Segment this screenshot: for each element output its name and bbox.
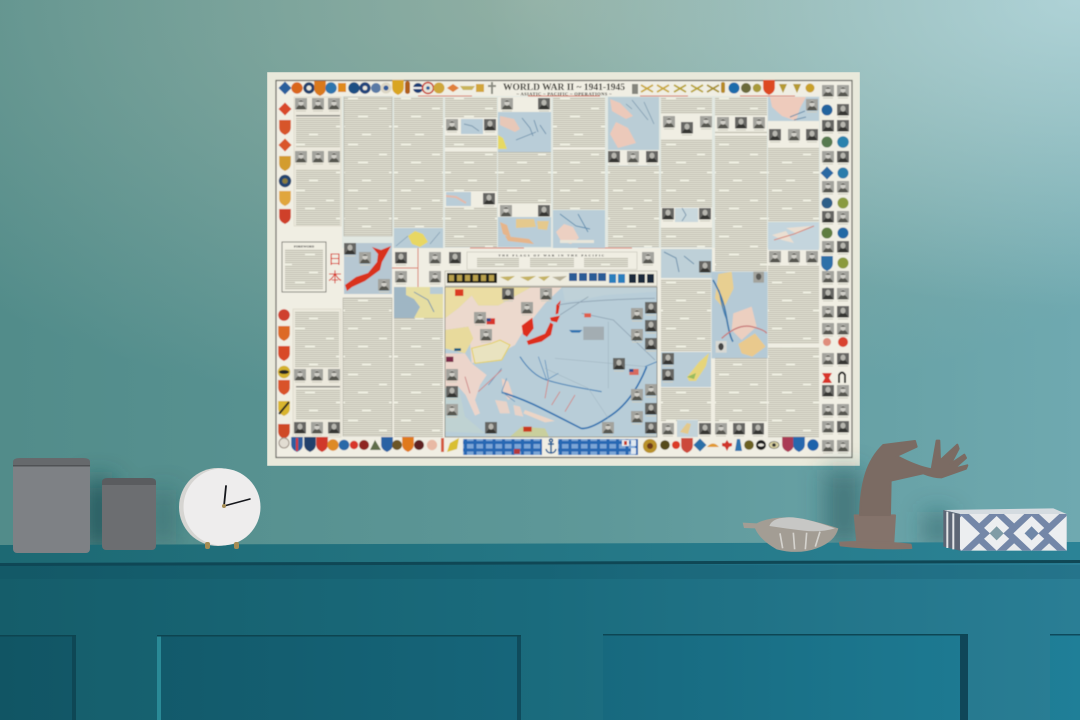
blue symbol strip right xyxy=(558,439,638,455)
black rank boxes xyxy=(447,273,497,283)
foreword box xyxy=(282,242,326,292)
column 7 xyxy=(608,97,659,247)
ship and note xyxy=(569,327,604,340)
poster sheet xyxy=(267,72,860,466)
portraits row xyxy=(769,251,818,264)
text column 5 xyxy=(498,97,551,247)
mantel front panel xyxy=(0,560,1080,720)
heading gap xyxy=(715,133,767,136)
cast shadows on wall xyxy=(86,470,951,550)
map: new guinea xyxy=(553,210,605,248)
portraits row lower xyxy=(294,422,340,436)
portraits top xyxy=(501,98,550,112)
japan in red xyxy=(522,300,561,345)
map: japan inset xyxy=(344,243,392,294)
blue chevrons xyxy=(569,273,606,281)
patterned box xyxy=(943,508,1067,551)
blue symbol strip left xyxy=(463,439,542,455)
hand sculpture xyxy=(840,441,967,548)
insignia strip xyxy=(445,271,657,286)
sea routes xyxy=(465,297,657,428)
portraits row xyxy=(661,114,712,139)
text column 2 lower xyxy=(343,298,392,436)
portraits row xyxy=(608,150,659,165)
land: northern yellow xyxy=(445,287,532,318)
kanji label: 日 xyxy=(328,252,342,267)
portraits row lower xyxy=(295,151,340,164)
large stone cylinder xyxy=(13,458,90,553)
column 10 xyxy=(768,97,819,438)
poster inner border xyxy=(276,80,852,458)
bottom badge row right xyxy=(643,437,819,453)
blue squares xyxy=(609,274,625,283)
text block xyxy=(608,166,659,247)
flags xyxy=(446,289,639,432)
portraits with inset map xyxy=(661,207,712,228)
recess panels xyxy=(0,634,1080,720)
text block xyxy=(295,311,339,367)
small stone cylinder xyxy=(102,478,156,550)
portraits lower xyxy=(498,204,551,218)
left badge column bottom xyxy=(278,309,290,448)
title: WORLD WAR II ~ 1941-1945 xyxy=(503,82,626,92)
left panel lower xyxy=(293,309,341,437)
text block xyxy=(661,139,712,207)
left badge column top xyxy=(278,102,292,224)
kanji label: 本 xyxy=(328,270,342,285)
text column 2 upper xyxy=(344,97,392,236)
land: china and manchuria xyxy=(445,287,562,363)
text column 4 xyxy=(445,97,497,247)
top badge row left xyxy=(278,80,496,96)
map: upper inset xyxy=(661,249,712,278)
bottom badge row left xyxy=(291,437,459,452)
title: ~ ASIATIC ~ PACIFIC ~ OPERATIONS ~ xyxy=(516,92,612,96)
map: column 3 island xyxy=(394,228,443,248)
right portrait column xyxy=(820,85,849,454)
left panel upper xyxy=(294,97,341,226)
white clock xyxy=(179,468,260,549)
map: east indies xyxy=(498,217,551,247)
map: okinawa xyxy=(661,352,711,387)
text column 3 upper xyxy=(394,97,443,228)
map: top xyxy=(768,97,819,121)
heading gap xyxy=(445,148,497,151)
poster xyxy=(267,72,860,466)
flags heading box: THE FLAGS OF WAR IN THE PACIFIC xyxy=(498,254,606,258)
clock feet xyxy=(205,542,239,549)
land: north east xyxy=(583,287,599,299)
shelf shadow xyxy=(0,560,1080,566)
map: column 3 lower xyxy=(394,287,443,318)
land: australia xyxy=(510,427,549,437)
portraits row xyxy=(294,369,340,382)
portrait strip with inset map xyxy=(445,118,497,135)
portraits row xyxy=(295,98,340,112)
command table xyxy=(296,386,340,420)
gold wings xyxy=(500,276,567,281)
column 9 xyxy=(712,97,768,436)
map portraits xyxy=(446,288,657,436)
inset map with portrait xyxy=(445,191,497,207)
portrait right of box xyxy=(642,252,654,266)
land: inner yellow region xyxy=(445,327,473,353)
command table xyxy=(296,115,340,147)
flags heading box xyxy=(467,252,637,270)
portraits row xyxy=(768,121,819,148)
text block xyxy=(296,170,340,225)
land: southeast asia xyxy=(445,353,487,416)
column gutters tint xyxy=(342,96,820,248)
text column 6 xyxy=(553,97,605,248)
mantel xyxy=(0,542,1080,720)
ocean xyxy=(445,287,657,437)
foreword box: FOREWORD xyxy=(294,244,315,248)
wall background xyxy=(0,0,1080,560)
top badge row right xyxy=(632,80,814,95)
map: pacific islands xyxy=(608,97,659,150)
icon: anchor xyxy=(546,439,556,453)
title xyxy=(503,82,626,96)
mantel shelf xyxy=(0,542,1080,563)
map: philippines xyxy=(712,272,768,358)
portraits row bottom xyxy=(715,423,764,436)
black squares xyxy=(629,274,654,283)
clock hands xyxy=(224,486,250,506)
text column 3 lower xyxy=(394,318,443,437)
shell bowl xyxy=(743,517,838,552)
land: philippines and islands xyxy=(502,378,513,400)
column 8 xyxy=(661,97,712,437)
map: solomon sea xyxy=(498,112,551,152)
portraits centre group xyxy=(395,252,461,284)
kanji label xyxy=(328,252,342,285)
map: lower xyxy=(768,222,819,250)
portraits row xyxy=(715,116,767,131)
red accent rules xyxy=(380,96,795,290)
portraits with inset map xyxy=(662,420,711,437)
main pacific map xyxy=(445,287,657,437)
